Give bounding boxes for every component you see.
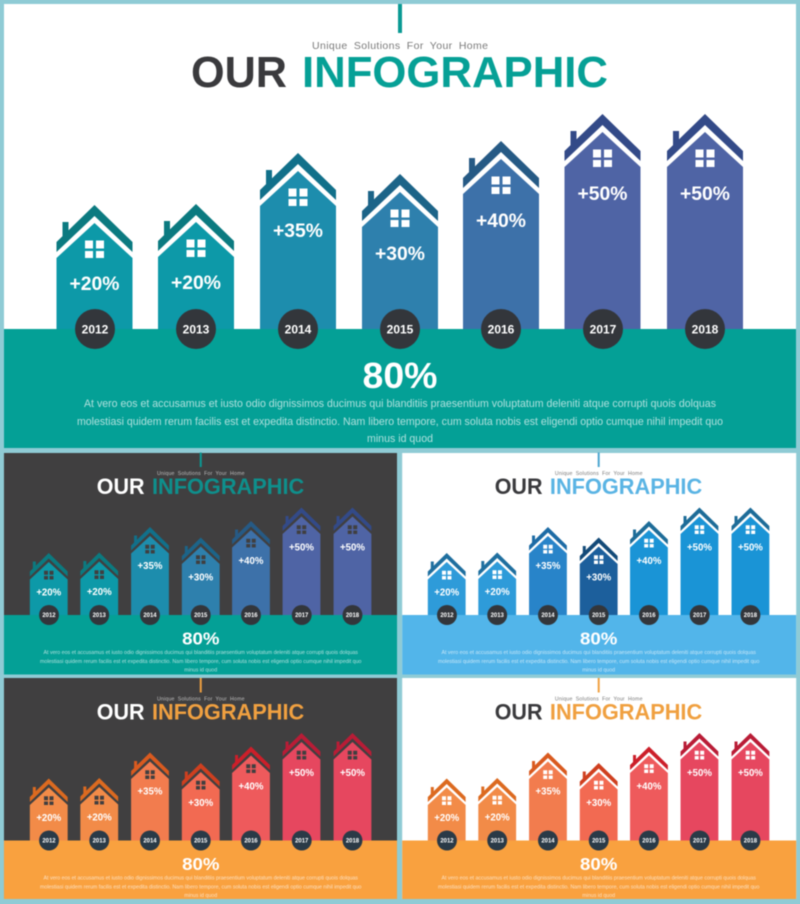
subtitle: Unique Solutions For Your Home — [555, 471, 643, 477]
title: OUR — [495, 699, 543, 725]
house: 2017 +50% — [681, 508, 718, 615]
description text: molestiasi quidem rerum facilis est et expedita distinctio. Nam libero tempore, cum soluta nobis est eligendi optio cumque nihil impedit quo — [438, 659, 759, 665]
description text: molestiasi quidem rerum facilis est et expedita distinctio. Nam libero tempore, cum soluta nobis est eligendi optio cumque nihil impedit quo — [77, 416, 723, 428]
house: 2017 +50%: +50% — [687, 768, 712, 779]
year markers: 2012 — [42, 613, 56, 619]
description text: At vero eos et accusamus et iusto odio dignissimos ducimus qui blanditiis praesentium voluptatum deleniti atque corrupti quois dolquas — [84, 398, 716, 410]
description text: molestiasi quidem rerum facilis est et expedita distinctio. Nam libero tempore, cum soluta nobis est eligendi optio cumque nihil impedit quo — [438, 884, 759, 891]
house: 2013 +20%: +20% — [485, 587, 510, 598]
house: 2014 +35% — [529, 527, 567, 615]
house: 2015 +30%: +30% — [375, 243, 425, 265]
stat: 80%: 80% — [182, 854, 219, 874]
year markers — [39, 605, 362, 625]
house: 2015 +30%: +30% — [586, 798, 611, 809]
year markers: 2018 — [346, 839, 360, 845]
house: 2014 +35% — [529, 752, 567, 840]
house: 2015 +30% — [580, 538, 618, 615]
band: teal base — [4, 615, 397, 674]
year markers: 2012 — [440, 839, 454, 845]
band: blue base — [402, 615, 796, 674]
description text — [77, 398, 723, 445]
house: 2015 +30% — [182, 538, 220, 615]
house: 2012 +20%: +20% — [434, 813, 459, 824]
stat: 80%: 80% — [362, 355, 438, 396]
description text: molestiasi quidem rerum facilis est et expedita distinctio. Nam libero tempore, cum soluta nobis est eligendi optio cumque nihil impedit quo — [40, 884, 361, 891]
house: 2017 +50% — [564, 114, 640, 329]
band: orange base — [402, 840, 796, 899]
year markers: 2018 — [744, 613, 758, 619]
description text — [438, 875, 759, 899]
title: INFOGRAPHIC — [302, 48, 608, 97]
description text: minus id quod — [184, 667, 217, 674]
panel: dark orange variant — [4, 678, 397, 899]
house: 2013 +20% — [478, 778, 516, 840]
house: 2013 +20%: +20% — [171, 272, 221, 294]
house: 2013 +20% — [478, 552, 516, 615]
house: 2012 +20%: +20% — [36, 813, 62, 824]
year markers: 2013 — [183, 322, 210, 336]
year markers: 2016 — [244, 839, 258, 845]
house: 2018 +50% — [334, 508, 371, 615]
stat: 80%: 80% — [182, 628, 219, 649]
panel: dark teal variant — [4, 452, 397, 674]
year markers: 2015 — [592, 839, 606, 845]
description text: minus id quod — [582, 667, 615, 674]
house: 2016 +40%: +40% — [239, 556, 264, 567]
house: 2015 +30%: +30% — [188, 798, 214, 809]
house: 2017 +50%: +50% — [289, 768, 314, 779]
year markers: 2013 — [93, 613, 107, 619]
house: 2013 +20% — [80, 552, 118, 615]
stat: 80%: 80% — [580, 628, 617, 649]
description text: At vero eos et accusamus et iusto odio dignissimos ducimus qui blanditiis praesentium voluptatum deleniti atque corrupti quois dolquas — [44, 650, 358, 656]
house: 2014 +35% — [131, 527, 169, 615]
house: 2012 +20% — [428, 778, 466, 840]
house: 2018 +50% — [667, 114, 743, 329]
year markers: 2013 — [491, 839, 505, 845]
panel: main teal infographic — [4, 4, 796, 448]
year markers: 2017 — [295, 613, 309, 619]
title: INFOGRAPHIC — [550, 699, 702, 725]
house: 2017 +50% — [283, 733, 320, 840]
house: 2018 +50%: +50% — [340, 768, 365, 779]
year markers: 2018 — [744, 839, 758, 845]
band: teal base — [4, 329, 796, 448]
year markers: 2015 — [387, 322, 414, 336]
band: orange base — [4, 840, 397, 899]
house: 2013 +20% — [80, 778, 118, 840]
house: 2012 +20% — [30, 553, 68, 615]
year markers: 2014 — [541, 613, 555, 619]
year markers: 2017 — [693, 839, 707, 845]
title: OUR — [495, 474, 543, 499]
title: OUR — [97, 699, 145, 725]
house: 2015 +30% — [182, 763, 220, 840]
house: 2015 +30% — [362, 174, 438, 329]
house: 2017 +50% — [681, 733, 718, 840]
house: 2018 +50%: +50% — [738, 542, 763, 554]
description text: At vero eos et accusamus et iusto odio dignissimos ducimus qui blanditiis praesentium voluptatum deleniti atque corrupti quois dolquas — [44, 875, 358, 882]
house: 2014 +35%: +35% — [138, 786, 163, 798]
title: INFOGRAPHIC — [550, 474, 702, 499]
house: 2018 +50% — [732, 508, 769, 615]
house: 2016 +40% — [463, 141, 539, 329]
description text: molestiasi quidem rerum facilis est et expedita distinctio. Nam libero tempore, cum soluta nobis est eligendi optio cumque nihil impedit quo — [40, 659, 361, 665]
house: 2018 +50%: +50% — [340, 542, 365, 554]
house: 2012 +20%: +20% — [70, 273, 120, 295]
stat: 80%: 80% — [580, 854, 617, 874]
year markers: 2014 — [541, 839, 555, 845]
description text: At vero eos et accusamus et iusto odio dignissimos ducimus qui blanditiis praesentium voluptatum deleniti atque corrupti quois dolquas — [441, 650, 756, 656]
subtitle: Unique Solutions For Your Home — [555, 696, 643, 703]
house: 2014 +35% — [260, 153, 336, 329]
house: 2016 +40% — [630, 746, 668, 840]
house: 2016 +40%: +40% — [637, 781, 662, 793]
house: 2013 +20%: +20% — [87, 587, 112, 598]
house: 2016 +40%: +40% — [637, 556, 662, 567]
house: 2012 +20% — [56, 205, 132, 329]
house: 2013 +20% — [158, 204, 234, 329]
description text — [40, 650, 361, 674]
year markers: 2015 — [194, 839, 208, 845]
house: 2012 +20%: +20% — [36, 587, 62, 599]
house: 2015 +30%: +30% — [188, 572, 214, 584]
year markers: 2015 — [194, 613, 208, 619]
year markers: 2013 — [93, 839, 107, 845]
year markers: 2013 — [491, 613, 505, 619]
panel: white orange variant — [402, 678, 796, 899]
year markers: 2017 — [295, 839, 309, 845]
house: 2014 +35%: +35% — [536, 561, 561, 572]
subtitle: Unique Solutions For Your Home — [157, 696, 245, 703]
year markers: 2016 — [642, 839, 656, 845]
year markers: 2014 — [285, 322, 312, 336]
house: 2016 +40%: +40% — [476, 210, 526, 232]
house: 2016 +40% — [232, 746, 270, 840]
year markers: 2012 — [440, 613, 454, 619]
year markers: 2016 — [488, 322, 515, 336]
year markers: 2018 — [346, 613, 360, 619]
year markers: 2014 — [143, 839, 157, 845]
house: 2017 +50%: +50% — [578, 183, 628, 205]
description text: minus id quod — [184, 893, 217, 899]
year markers: 2012 — [42, 839, 56, 845]
house: 2018 +50% — [334, 733, 371, 840]
description text — [40, 875, 361, 899]
year markers: 2016 — [244, 613, 258, 619]
year markers: 2016 — [642, 613, 656, 619]
year markers — [437, 605, 760, 625]
panel: white blue variant — [402, 452, 796, 674]
house: 2012 +20%: +20% — [434, 587, 459, 599]
house: 2018 +50%: +50% — [680, 183, 730, 205]
year markers: 2014 — [143, 613, 157, 619]
house: 2012 +20% — [428, 553, 466, 615]
house: 2016 +40% — [630, 521, 668, 615]
house: 2015 +30% — [580, 763, 618, 840]
description text: minus id quod — [582, 893, 615, 899]
house: 2012 +20% — [30, 778, 68, 840]
house: 2017 +50%: +50% — [687, 542, 712, 554]
year markers: 2018 — [692, 322, 719, 336]
house: 2014 +35%: +35% — [273, 220, 323, 242]
year markers: 2017 — [590, 322, 617, 336]
house: 2013 +20%: +20% — [485, 812, 510, 824]
house: 2014 +35%: +35% — [138, 561, 163, 572]
house: 2015 +30%: +30% — [586, 572, 611, 584]
year markers — [39, 830, 362, 850]
house: 2017 +50% — [283, 508, 320, 615]
description text: At vero eos et accusamus et iusto odio dignissimos ducimus qui blanditiis praesentium voluptatum deleniti atque corrupti quois dolquas — [441, 875, 756, 882]
house: 2018 +50% — [732, 733, 769, 840]
description text — [438, 650, 759, 674]
house: 2013 +20%: +20% — [87, 812, 112, 824]
house: 2017 +50%: +50% — [289, 542, 314, 554]
house: 2016 +40% — [232, 521, 270, 615]
house: 2016 +40%: +40% — [239, 781, 264, 793]
title: OUR — [97, 474, 145, 499]
title: OUR — [191, 48, 287, 97]
subtitle: Unique Solutions For Your Home — [312, 40, 488, 52]
description text: minus id quod — [367, 433, 433, 445]
year markers: 2015 — [592, 613, 606, 619]
year markers: 2017 — [693, 613, 707, 619]
year markers — [437, 830, 760, 850]
house: 2018 +50%: +50% — [738, 768, 763, 779]
year markers — [75, 309, 725, 349]
title: INFOGRAPHIC — [152, 474, 304, 499]
title: INFOGRAPHIC — [152, 699, 304, 725]
house: 2014 +35% — [131, 752, 169, 840]
subtitle: Unique Solutions For Your Home — [157, 471, 245, 477]
house: 2014 +35%: +35% — [536, 786, 561, 798]
year markers: 2012 — [82, 322, 109, 336]
